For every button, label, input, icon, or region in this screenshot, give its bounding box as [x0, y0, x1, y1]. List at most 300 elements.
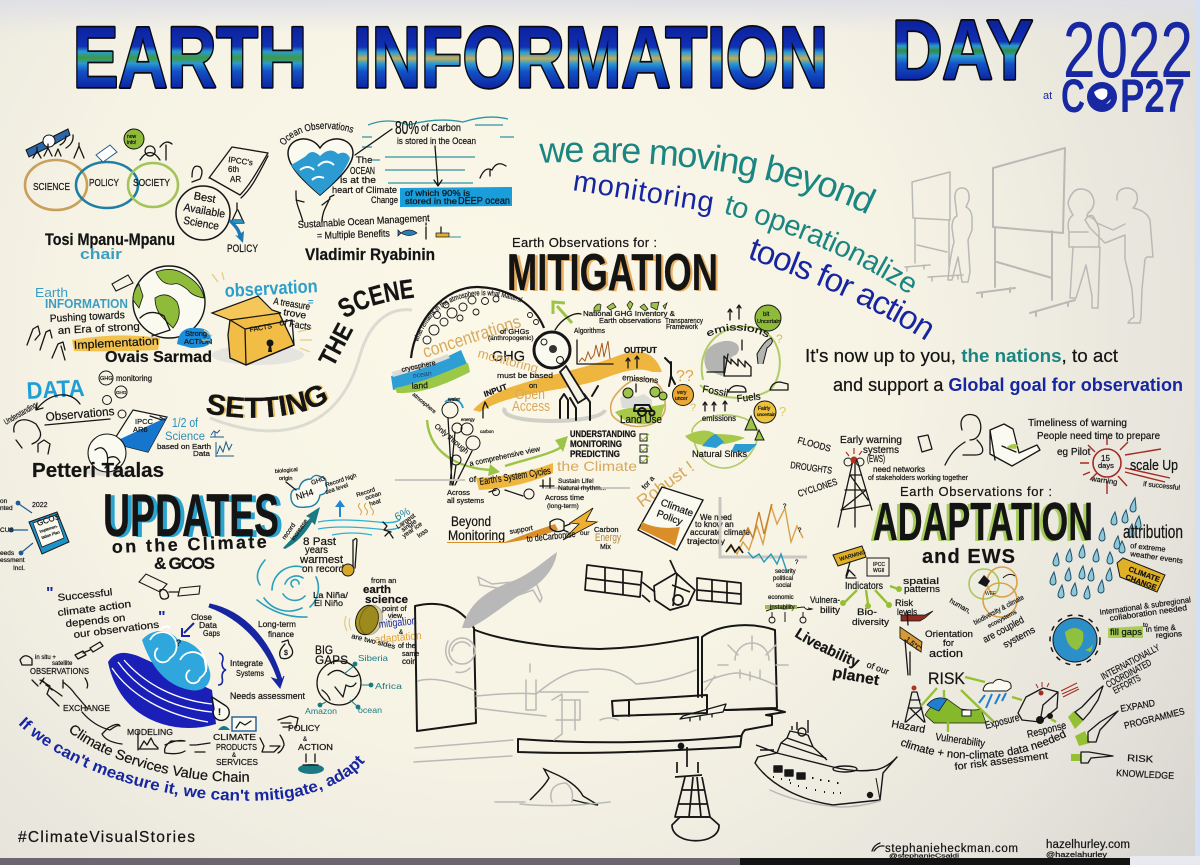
text: risk labels: Response	[1026, 720, 1068, 741]
icon: very uncertain: very	[677, 390, 687, 396]
panel: Earth observations for mitigation: a comprehensive view	[469, 444, 541, 468]
icon: screen	[218, 717, 256, 731]
icon: ambulance	[1018, 682, 1079, 724]
heading: earth information	[35, 285, 128, 311]
text: la nina el nino	[313, 590, 349, 608]
icon: NH4 and GHG cloud: NH4	[295, 487, 315, 502]
text: to decarbonise our energy mix: our	[580, 530, 590, 537]
quote: moving beyond monitoring: monitoring	[571, 165, 716, 219]
callout: best available science: Available	[183, 202, 226, 221]
band: support: support	[509, 525, 533, 536]
text: to decarbonise our energy mix: Mix	[600, 544, 611, 551]
band: input output flow	[473, 352, 662, 412]
panel: fossil fuels circle	[699, 304, 789, 405]
text: indicators and branches: Indicators	[845, 580, 883, 592]
text: hand labels	[1099, 642, 1186, 782]
labels: GCOS branches: nted	[0, 505, 13, 512]
text: indicator labels: bility	[820, 605, 841, 615]
icon: coin	[345, 602, 386, 638]
icon: heart with waves	[288, 139, 353, 195]
labels: GCOS branches: eeds	[0, 550, 15, 557]
text: 80 percent of carbon	[395, 118, 476, 147]
icon: wave swirl graphic	[108, 626, 216, 728]
heading: on the climate: on the Climate	[111, 532, 267, 557]
text: eight past years	[299, 536, 344, 575]
top edge shading	[0, 0, 1200, 34]
text: across time: (long-term)	[547, 503, 579, 510]
text: understanding monitoring predicting: PREDICTING	[570, 449, 620, 459]
callout: strong action: Strong	[185, 329, 207, 338]
text: ocean at the heart of climate change: is at the	[340, 175, 376, 186]
icon: fairly uncertain: ?	[779, 404, 786, 419]
text: credits	[872, 839, 1130, 860]
heading: speaker name: Tosi Mpanu-Mpanu	[45, 231, 175, 249]
text: big gaps: GAPS	[315, 653, 348, 667]
text: six percent largest ice loss: Largest	[395, 512, 417, 531]
text: of GHGs: (anthropogenic)	[488, 335, 534, 342]
heading: mitigation: MITIGATION	[507, 244, 718, 302]
icon: woman and open box	[918, 415, 1040, 466]
icon: GCOS book: Implemen-	[39, 523, 59, 534]
icon: wave swirl graphic: ?	[176, 638, 181, 648]
icon: NH4 and GHG cloud	[291, 475, 327, 507]
heading: earth observations for: Earth Observations for :	[900, 484, 1052, 499]
text: coupled systems: systems	[1001, 624, 1037, 651]
tag: climate change	[1117, 558, 1165, 592]
text: across all systems: all systems	[447, 496, 484, 505]
callout: best available science: Best	[193, 190, 217, 206]
icons: GHG bubbles	[99, 371, 152, 418]
heading: setting the scene: SETTING	[210, 385, 329, 418]
panel: Earth observations for mitigation: monitoring	[476, 345, 540, 376]
icon: small satellite and in situ	[20, 642, 103, 667]
text: floods droughts cyclones	[790, 435, 839, 500]
text: treasure trove of facts: of Facts	[279, 317, 312, 333]
icon: climate policy book: Climate	[659, 497, 695, 520]
text: biological origin and increases: Record	[356, 487, 376, 499]
text: sustainable ocean management	[298, 213, 430, 242]
text: biological origin and increases	[275, 467, 382, 508]
text: indicator labels: Risk	[895, 598, 914, 608]
icon: money bag	[280, 640, 293, 659]
lollipop diagram water energy carbon: water	[448, 397, 461, 403]
icon: globe	[85, 434, 129, 476]
lollipop diagram water energy carbon: energy	[461, 417, 476, 422]
text: treasure trove of facts: trove	[283, 307, 307, 322]
text: floods droughts cyclones: DROUGHTS	[790, 460, 833, 477]
heading: setting the scene: SETTING	[206, 386, 328, 418]
text: indicator labels: Bio-	[857, 607, 877, 617]
text: orientation for action	[925, 629, 973, 660]
panel: fossil fuels circle: emissions	[707, 324, 769, 338]
swoosh	[210, 310, 412, 431]
text: based on earth data: Data	[193, 449, 211, 458]
heading: beyond monitoring: Beyond	[451, 513, 491, 529]
text: chain labels: PRODUCTS	[216, 742, 257, 752]
text: of GHGs	[488, 327, 534, 342]
text: six percent largest ice loss: loss	[416, 527, 430, 540]
text: understanding monitoring predicting	[570, 429, 636, 459]
text: half of science: 1/2 of	[172, 415, 198, 430]
text: close data gaps: Close	[191, 612, 212, 622]
chart: climate trajectory: ?	[795, 560, 799, 566]
text: indicator labels: diversity	[852, 617, 890, 627]
heading: setting the scene	[206, 279, 414, 432]
text: pilot scale up: scale Up	[1130, 457, 1178, 474]
icon: treasure chest	[202, 272, 312, 365]
icon: person pointing and question marks: ?	[690, 402, 696, 414]
text: international collaboration fill gaps: collaboration needed	[1109, 603, 1188, 623]
panel: Earth observations for mitigation: ?	[776, 332, 783, 346]
panel: natural sinks	[685, 401, 764, 468]
risk connecting green lines	[921, 677, 1056, 732]
panel: updates on the climate and GCOS	[0, 467, 430, 716]
arrow arc	[36, 395, 110, 425]
text: six percent largest ice loss: 6%	[393, 505, 413, 524]
text: to decarbonise our energy mix	[526, 525, 621, 551]
icon: exclamation drop	[212, 697, 229, 720]
text: the nations to act: It's now up to you, the nations, to act	[805, 346, 1118, 366]
text: pushing towards	[50, 309, 140, 337]
panel: Ovais Sarmad earth information	[27, 266, 318, 366]
text: pilot scale up: eg Pilot	[1057, 447, 1091, 458]
icons: checkboxes	[640, 434, 649, 463]
text: biological origin and increases: sea level	[325, 483, 349, 496]
icon: security scales: security	[775, 569, 796, 575]
text: to decarbonise our energy mix: Energy	[595, 532, 621, 544]
icons: country shapes	[594, 301, 667, 311]
text: across all systems: Across	[447, 488, 470, 497]
text: ocean at the heart of climate change: Change	[371, 195, 398, 206]
icon: red warning sun: days	[1098, 461, 1114, 470]
text: eight past years: on record	[302, 564, 344, 575]
callout: deep ocean blue bar: stored in the	[405, 196, 457, 206]
heading: setting the scene: THE	[314, 319, 359, 371]
text: mitigation adaptation two sides: mitigation	[378, 615, 417, 631]
text: international collaboration fill gaps: to	[1143, 623, 1149, 629]
text: hand labels: EXPAND	[1120, 698, 1156, 715]
text: venn labels: POLICY	[89, 177, 119, 189]
text: successful climate action quote: Successful	[57, 587, 113, 604]
text: the nations to act: and support a Global goal for observation	[833, 375, 1183, 395]
text: pilot scale up	[1057, 447, 1181, 492]
text: understanding: Understanding	[2, 400, 38, 427]
heading: observation: observation	[224, 275, 318, 301]
heading: updates: UPDATES	[107, 483, 283, 550]
text: hashtag: #ClimateVisualStories	[18, 829, 195, 846]
icon: storm cloud	[979, 679, 1011, 708]
text: chain labels: ACTION	[298, 742, 333, 752]
icon: GCOS book: 2022	[32, 502, 48, 509]
callout: deep ocean blue bar	[400, 187, 512, 207]
text: concentrations: concentrations	[420, 311, 523, 362]
quote: moving beyond monitoring: to operationalize	[726, 196, 915, 292]
text: big gaps	[315, 643, 348, 667]
landscape strip cryosphere ocean land: atmosphere	[411, 392, 437, 415]
text: risk labels: Hazard	[890, 718, 926, 736]
icon: warning tower	[838, 448, 872, 527]
text: coupled systems: ecosystems	[987, 610, 1018, 630]
callout: strong action	[177, 328, 212, 348]
icon: chart	[138, 731, 158, 750]
icon: satellite	[26, 129, 73, 157]
icon: globe with observation gaps	[1050, 615, 1100, 665]
text: attribution: attribution	[1123, 522, 1183, 542]
text: credits: stephanieheckman.com	[885, 843, 1018, 855]
text: successful climate action quote: "	[158, 609, 166, 626]
callout line and arrow	[355, 129, 442, 186]
diagram: coupled systems venn	[969, 567, 1017, 617]
text: climate and non-climate data: climate + non-climate data needed	[901, 729, 1066, 759]
text: chain labels: &	[303, 737, 307, 743]
icon: small satellite	[112, 275, 133, 291]
arrow: dark blue long arrow	[209, 604, 284, 688]
lollipop diagram water energy carbon: carbon	[480, 429, 494, 434]
text: earth science: view,	[388, 613, 404, 620]
panel: fossil fuels circle: Fuels	[736, 392, 761, 405]
icon: risk tower	[905, 686, 925, 722]
text: national GHG inventory: Earth observations	[599, 318, 662, 325]
text: national GHG inventory: National GHG Inventory &	[583, 311, 675, 318]
labels: GCOS branches	[0, 498, 33, 572]
ground line and sustain life: Natural rhythm...	[558, 485, 606, 492]
heading: and EWS: and EWS	[922, 546, 1015, 568]
icon: person pointing and question marks	[665, 358, 696, 414]
text: earth science: from an	[371, 576, 396, 585]
text: treasure trove of facts	[273, 296, 314, 333]
band: support	[447, 524, 558, 543]
icon: IPCC report: IPCC's	[228, 155, 253, 167]
icon: action shoes	[298, 754, 324, 774]
bracket: integrate systems: Integrate	[230, 658, 263, 668]
text: eight past years: years	[305, 545, 328, 556]
title	[73, 3, 1033, 106]
text: six percent largest ice loss: year ice	[401, 521, 424, 540]
arc green with comprehensive view	[427, 420, 565, 470]
arrow: to policy	[229, 219, 244, 243]
text: indicator labels: spatial	[903, 576, 939, 586]
lollipop diagram water energy carbon	[442, 397, 494, 485]
text: based on earth data	[157, 442, 211, 458]
text: the nations to act	[805, 346, 1183, 395]
text: earth science: earth	[363, 584, 391, 596]
labels: gap regions: ocean	[358, 705, 382, 715]
water lines and up arrow	[318, 520, 400, 535]
icon: direction signposts: 1.5°C	[904, 635, 922, 653]
heading: beyond monitoring: Monitoring	[448, 527, 505, 543]
icons: warning sign and IPCC doc: IPCC	[873, 562, 885, 568]
text: la nina el nino: La Niña/	[313, 590, 349, 600]
text: ocean observations: Ocean Observations	[280, 122, 354, 145]
text: coupled systems	[948, 594, 1037, 651]
chart: climate trajectory: ?	[798, 528, 802, 534]
ground line and sustain life: Sustain Life!	[558, 478, 594, 485]
text: understanding monitoring predicting: UNDERSTANDING	[570, 429, 636, 439]
icon: very uncertain: uncer	[675, 396, 688, 402]
text: chain labels: OBSERVATIONS	[30, 666, 89, 676]
year and event: at	[1043, 90, 1052, 102]
text: coupled systems: human,	[948, 598, 972, 615]
icon: IPCC AR6 report: IPCC	[135, 417, 154, 426]
callout: best available science: Science	[182, 215, 220, 233]
heading: updates: UPDATES	[103, 482, 279, 549]
arrow to half of science	[150, 416, 165, 420]
text: mitigation adaptation two sides: &	[399, 630, 403, 636]
text: earth science	[363, 576, 408, 620]
panel: Earth observations for adaptation	[765, 414, 1192, 782]
text: earth science: point of	[382, 604, 408, 613]
text: hand labels: COORDINATED	[1104, 657, 1154, 691]
text: pilot scale up: if successful	[1143, 481, 1181, 492]
icon: fairly uncertain	[754, 401, 786, 423]
text: credits: @stephanieCsaldi	[889, 854, 959, 860]
chart: algorithms	[574, 326, 613, 364]
heading: speaker name: Ovais Sarmad	[105, 349, 212, 366]
text: policy: POLICY	[227, 243, 259, 255]
text: long term finance: finance	[268, 630, 295, 639]
text: big gaps: BIG	[315, 643, 333, 657]
heading: speaker name: Vladimir Ryabinin	[305, 246, 435, 264]
text: pushing towards: Pushing towards	[50, 309, 125, 325]
text: six percent largest ice loss	[383, 505, 430, 540]
landscape strip cryosphere ocean land: ocean	[412, 370, 432, 380]
text: the climate: the Climate	[557, 458, 637, 474]
text: we need accurate trajectory: trajectory	[687, 537, 725, 546]
icon: policy pen and person: info!	[127, 140, 136, 146]
icon: plug	[550, 519, 570, 532]
text: close data gaps: Data	[199, 620, 217, 630]
callout: deep ocean blue bar: of which 90% is	[405, 188, 470, 198]
text: we need accurate trajectory: to know an	[695, 520, 734, 529]
text: risk labels	[890, 712, 1068, 750]
text: timeliness of warning: Timeliness of warning	[1028, 417, 1127, 429]
text: international collaboration fill gaps: fill gaps	[1110, 627, 1142, 638]
text: international collaboration fill gaps: International & subregional	[1099, 595, 1192, 617]
icon: security scales: instability	[770, 605, 795, 611]
heading: speaker name: Petteri Taalas	[32, 460, 164, 482]
icon: IPCC report	[209, 147, 268, 198]
icons: warning sign and IPCC doc: WGII	[873, 568, 884, 574]
icon: climate policy book	[638, 487, 703, 550]
heading: updates	[103, 482, 283, 550]
labels: GCOS branches: Incl.	[13, 565, 25, 572]
text: observations: Observations	[45, 404, 115, 424]
heading: risk: RISK	[928, 669, 966, 688]
text: successful climate action quote: depends on	[65, 613, 126, 630]
chart: climate trajectory	[720, 497, 807, 572]
text: early warning systems: of stakeholders working together	[868, 473, 968, 482]
text: early warning systems: Early warning	[840, 435, 902, 446]
text: hand labels: RISK	[1127, 753, 1154, 765]
text: national GHG inventory: Transparency	[665, 318, 703, 325]
text: eight past years: 8 Past	[303, 536, 336, 548]
icon: person pointing and question marks: ??	[676, 368, 694, 385]
icon: GCOS book: GCOS	[36, 512, 61, 528]
text: chain labels: CLIMATE	[213, 732, 256, 742]
text: coupled systems: biodiversity & climate	[973, 594, 1025, 627]
callout: best available science	[176, 186, 230, 240]
text: needs assessment: Needs assessment	[230, 691, 305, 701]
chart: climate trajectory: ?	[783, 504, 787, 510]
icon: satellite	[585, 560, 741, 610]
text: venn labels: SCIENCE	[33, 181, 70, 193]
bottom floor strip	[0, 856, 1200, 865]
text: climate services value chain: Climate Services Value Chain	[70, 725, 249, 782]
landscape strip cryosphere ocean land: cryosphere	[401, 360, 436, 374]
text: six percent largest ice loss: single	[400, 518, 418, 534]
icon: treasure chest: FACTS	[249, 323, 273, 334]
icon: research ship	[755, 720, 897, 807]
heading: earth information: INFORMATION	[45, 296, 128, 311]
icon: bit uncertain: bit	[763, 312, 770, 318]
text: across time	[489, 488, 584, 510]
text: biological origin and increases: heat	[369, 498, 382, 508]
icon: red warning sun	[1080, 437, 1170, 494]
heading: setting the scene: SCENE	[338, 279, 414, 317]
icon: fairly uncertain: uncertain	[757, 412, 776, 417]
sketch: grey venue hills and emblem	[414, 636, 788, 762]
text: hand labels: PROGRAMMES	[1123, 706, 1186, 732]
text: attribution: weather events	[1129, 549, 1184, 565]
icon: GCOS book: tation Plan	[41, 529, 60, 540]
icon: exclamation drop: !	[218, 707, 221, 717]
diagram: chain links	[40, 678, 284, 754]
icon: IPCC AR6 report	[112, 410, 167, 452]
quote: moving beyond monitoring	[539, 142, 932, 340]
arrows	[32, 680, 62, 696]
chart: algorithms: Algorithms	[574, 326, 605, 335]
highlight: earth system cycles	[469, 463, 553, 490]
icon: buoy	[672, 744, 719, 841]
icon: IPCC report: AR	[230, 175, 241, 184]
icon: thinking head	[14, 420, 50, 454]
icon: hands	[296, 191, 334, 222]
icon: red warning sun: warning	[1090, 474, 1118, 487]
panel: natural sinks: emissions	[702, 414, 736, 423]
icons: warning sign and IPCC doc: WARMING	[839, 550, 867, 563]
text: 80 percent of carbon: of Carbon	[421, 123, 461, 134]
landscape strip cryosphere ocean land	[391, 350, 470, 415]
icon: flask and figure	[231, 203, 244, 223]
text: understanding monitoring predicting: MONITORING	[570, 439, 622, 449]
quote: moving beyond monitoring: we are moving beyond	[539, 142, 877, 214]
text: orientation for action: for	[943, 638, 954, 649]
text: biological origin and increases: Record high	[325, 473, 357, 489]
panel: fossil fuels circle: Fossil	[701, 384, 729, 399]
text: chain labels: SERVICES	[216, 757, 258, 767]
icon: NH4 and GHG cloud: GHG	[310, 475, 327, 487]
diagram: three overlapping circles	[25, 160, 178, 210]
icon: ocean heat	[358, 503, 374, 515]
text: indicator labels: Vulnera-	[810, 595, 840, 605]
labels: gap regions: Siberia	[358, 653, 388, 663]
text: earth science: science	[365, 594, 408, 606]
landscape strip cryosphere ocean land: land	[411, 380, 428, 391]
title: EARTH	[73, 10, 307, 106]
text: of GHGs: of GHGs	[500, 327, 529, 336]
text: attribution: of extreme	[1130, 541, 1166, 554]
sea lines	[362, 117, 514, 183]
text: hand labels: INTERNATIONALLY	[1099, 642, 1162, 683]
text: chain labels	[30, 666, 333, 767]
labels: gap regions	[305, 653, 402, 716]
panel: Vladimir Ryabinin ocean	[280, 116, 514, 264]
panel: Petteri Taalas data	[2, 371, 234, 482]
text: eight past years: warmest	[299, 554, 343, 566]
panel: Earth observations for mitigation	[391, 235, 807, 572]
text: early warning systems: need networks	[873, 465, 925, 474]
icon: money bag: $	[284, 650, 288, 657]
